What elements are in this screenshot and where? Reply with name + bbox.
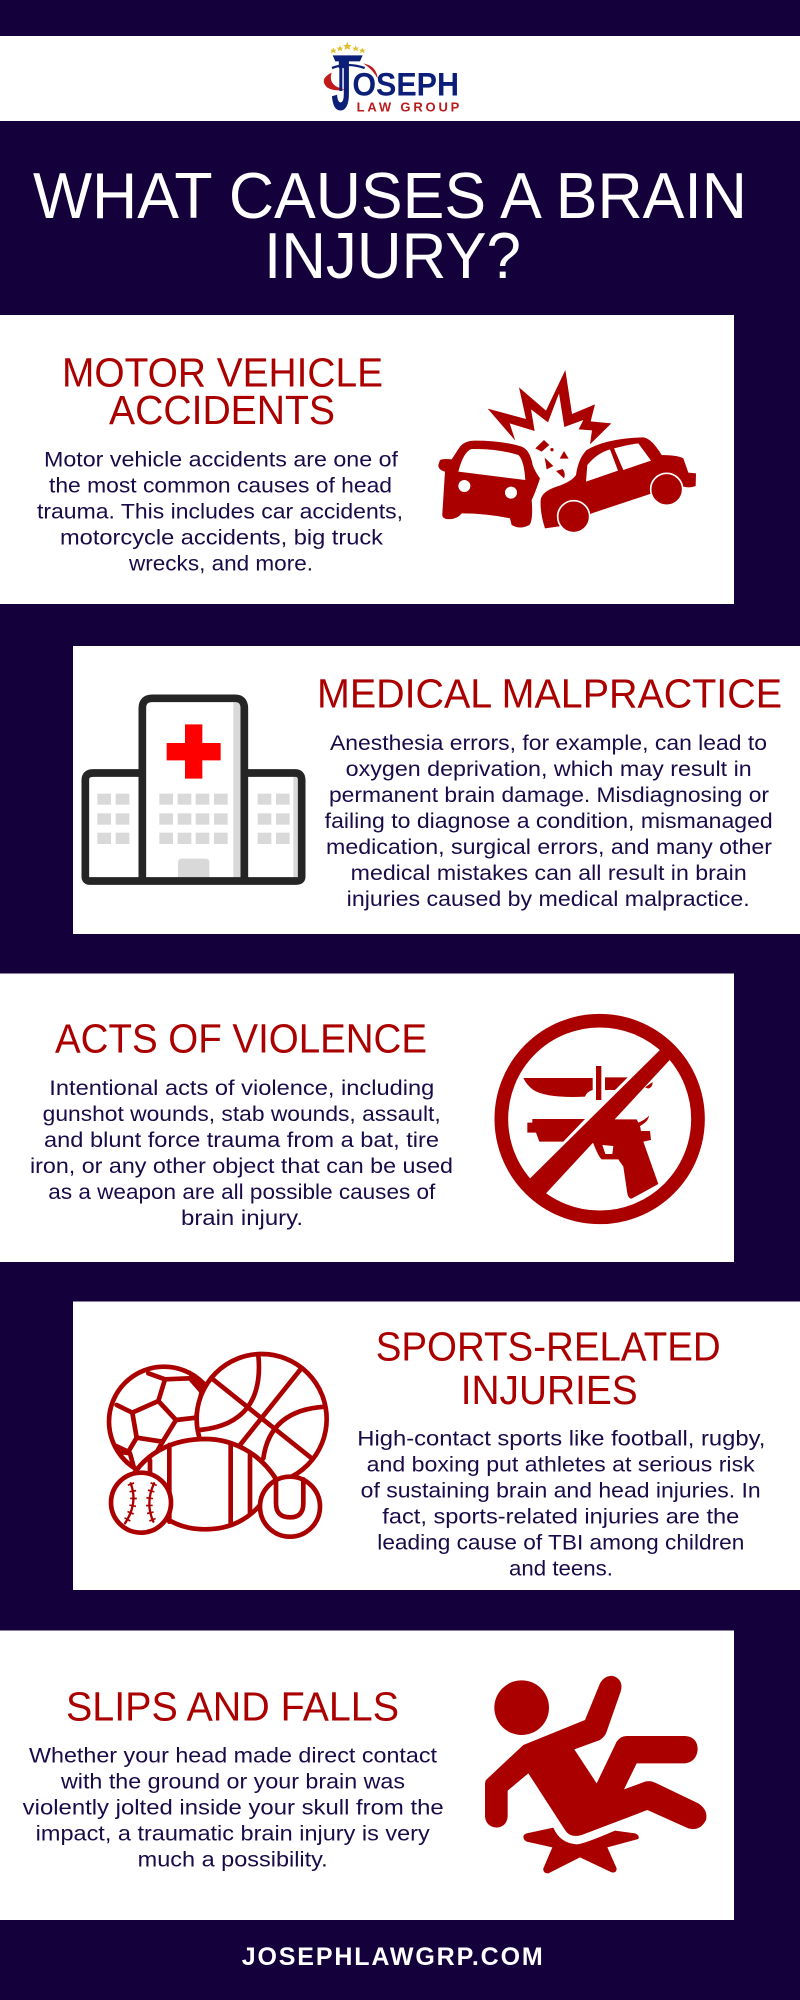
text: sports-related injuries: of sustaining brain and head injuries. In (361, 1480, 761, 1503)
text: sports-related injuries (357, 1428, 765, 1581)
text: motor vehicle accidents: motorcycle accidents, big truck (60, 527, 384, 550)
text: slips and falls (23, 1745, 444, 1872)
text: slips and falls: much a possibility. (138, 1849, 328, 1872)
title: WHAT CAUSES A BRAIN (33, 160, 747, 232)
text: medical malpractice: oxygen deprivation, which may result in (346, 758, 752, 781)
icon: sports balls (109, 1354, 327, 1537)
panel: acts of violence (0, 974, 734, 1262)
text: motor vehicle accidents: the most common causes of head (49, 475, 392, 498)
panel: medical malpractice (73, 646, 800, 934)
text: motor vehicle accidents (37, 449, 403, 576)
text: motor vehicle accidents: trauma. This includes car accidents, (37, 501, 403, 524)
logo banner (0, 36, 800, 126)
text: motor vehicle accidents: Motor vehicle accidents are one of (44, 449, 398, 472)
text: slips and falls: violently jolted inside your skull from the (23, 1797, 444, 1820)
text: sports-related injuries: leading cause of TBI among children (377, 1532, 744, 1555)
heading: acts of violence: ACTS OF VIOLENCE (55, 1016, 427, 1062)
text: medical malpractice: Anesthesia errors, for example, can lead to (330, 732, 767, 755)
text: medical malpractice: medication, surgical errors, and many other (326, 836, 772, 859)
text: medical malpractice: failing to diagnose a condition, mismanaged (325, 810, 773, 833)
text: slips and falls: impact, a traumatic brain injury is very (36, 1823, 430, 1846)
text: motor vehicle accidents: wrecks, and more. (128, 553, 313, 576)
heading: motor vehicle accidents: ACCIDENTS (109, 387, 335, 433)
logo: Joseph Law Group: J (331, 45, 351, 126)
icon: person falling (485, 1676, 706, 1873)
text: sports-related injuries: High-contact sports like football, rugby, (357, 1428, 765, 1451)
heading: sports-related injuries (376, 1324, 721, 1413)
text: acts of violence: and blunt force trauma from a bat, tire (44, 1129, 439, 1152)
heading: sports-related injuries: SPORTS-RELATED (376, 1324, 721, 1370)
text: medical malpractice: medical mistakes can all result in brain (351, 862, 747, 885)
icon: car crash (438, 370, 696, 533)
panel: sports-related injuries (73, 1302, 800, 1590)
text: acts of violence: Intentional acts of violence, including (49, 1077, 434, 1100)
text: sports-related injuries: and boxing put athletes at serious risk (367, 1454, 755, 1477)
heading: slips and falls: SLIPS AND FALLS (66, 1684, 399, 1730)
logo: Joseph Law Group: LAW GROUP (357, 99, 460, 114)
heading: medical malpractice: MEDICAL MALPRACTICE (317, 671, 782, 717)
heading: motor vehicle accidents: MOTOR VEHICLE (62, 350, 383, 396)
icon: hospital (85, 698, 302, 881)
text: medical malpractice (325, 732, 773, 911)
text: acts of violence: gunshot wounds, stab wounds, assault, (43, 1103, 441, 1126)
text: slips and falls: Whether your head made direct contact (29, 1745, 437, 1768)
logo: Joseph Law Group (324, 42, 460, 126)
title: INJURY? (264, 220, 521, 292)
heading: motor vehicle accidents (62, 350, 383, 433)
text: acts of violence (30, 1077, 453, 1230)
panel: slips and falls (0, 1630, 734, 1920)
text: medical malpractice: permanent brain damage. Misdiagnosing or (329, 784, 769, 807)
text: acts of violence: brain injury. (181, 1207, 303, 1230)
panel: motor vehicle accidents (0, 315, 734, 604)
text: sports-related injuries: and teens. (509, 1558, 613, 1581)
title (33, 160, 747, 292)
text: medical malpractice: injuries caused by medical malpractice. (347, 888, 750, 911)
text: acts of violence: as a weapon are all possible causes of (48, 1181, 435, 1204)
logo: Joseph Law Group: OSEPH (352, 66, 459, 102)
text: sports-related injuries: fact, sports-related injuries are the (382, 1506, 739, 1529)
heading: sports-related injuries: INJURIES (461, 1367, 638, 1413)
text: acts of violence: iron, or any other object that can be used (30, 1155, 453, 1178)
footer url: JOSEPHLAWGRP.COM (242, 1943, 543, 1971)
text: slips and falls: with the ground or your brain was (60, 1771, 405, 1794)
icon: no weapons (501, 1021, 698, 1217)
